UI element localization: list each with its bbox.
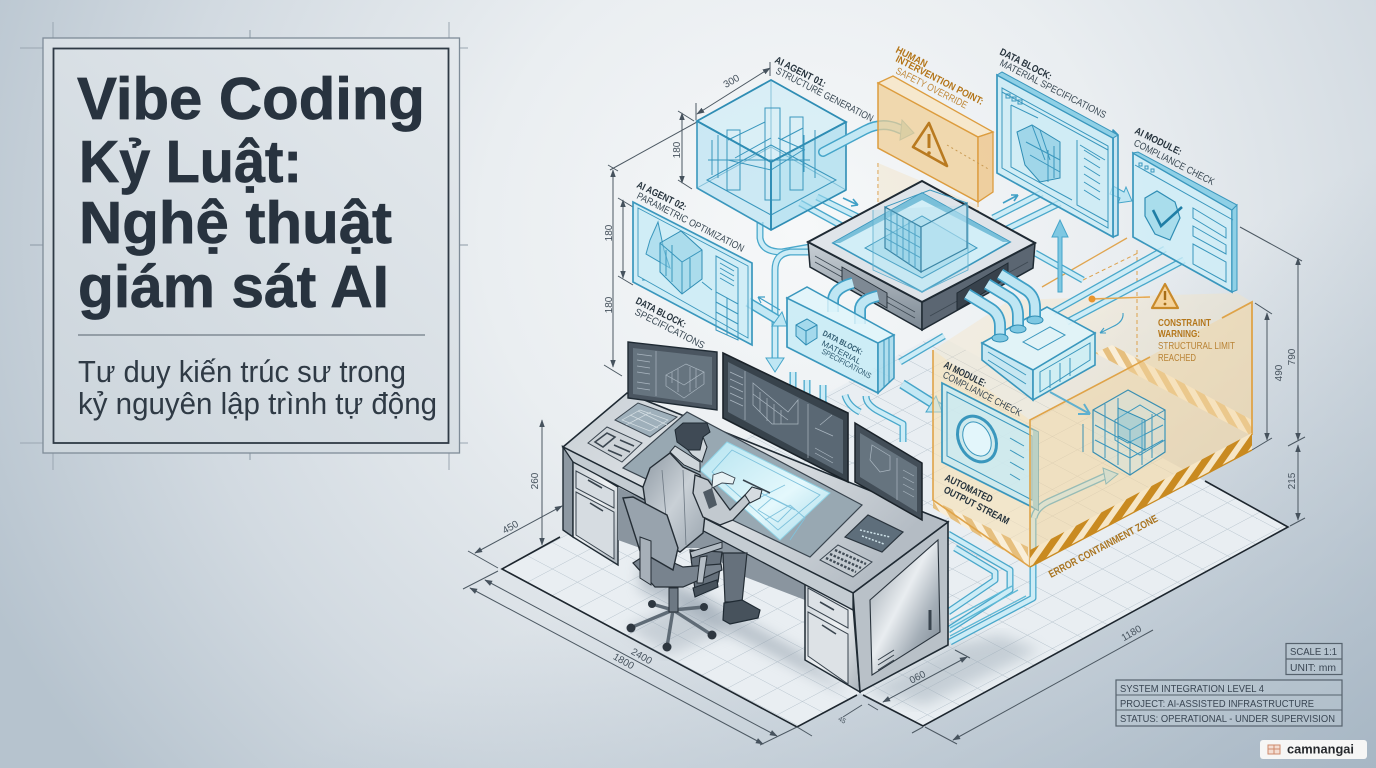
label: AI module top (1132, 126, 1216, 188)
icon: ring diagram (950, 409, 1004, 469)
label: error containment zone: ERROR CONTAINMENT ZONE (1047, 513, 1160, 581)
icon: small data cube (796, 319, 817, 345)
arrow: cube to human override (823, 120, 914, 152)
dimension labels: 790 (1287, 348, 1298, 365)
panel: data block center (787, 287, 894, 393)
label: data block specifications: DATA BLOCK: (634, 296, 688, 331)
left pedestal (563, 447, 618, 565)
label: human intervention point: INTERVENTION POINT: (894, 54, 985, 108)
label: human intervention point: HUMAN (894, 45, 929, 70)
dimension labels: 180 (604, 224, 615, 241)
label: AI agent 02: AI AGENT 02: (635, 180, 688, 213)
panel: data block center: SPECIFICATIONS (820, 347, 873, 381)
title frame (20, 22, 468, 470)
badge: camnangai: camnangai (1287, 742, 1354, 756)
label: AI module lower: COMPLIANCE CHECK (941, 370, 1023, 419)
flow arrows (758, 186, 1132, 484)
title: Kỷ Luật: (79, 128, 302, 195)
panel: data block center: DATA BLOCK: (821, 329, 864, 357)
dimension labels: 1800 (611, 652, 636, 672)
project title block: PROJECT: AI-ASSISTED INFRASTRUCTURE (1120, 698, 1314, 710)
floor grid (502, 334, 1288, 727)
head (688, 437, 707, 462)
orange frame: containment walls left (933, 350, 1030, 567)
monitor: right (855, 423, 922, 520)
label: automated output stream (942, 473, 1011, 527)
label: AI module top: COMPLIANCE CHECK (1132, 138, 1216, 188)
label: data block material specifications: DATA BLOCK: (998, 47, 1053, 83)
panel: AI agent 01 cube (697, 80, 846, 230)
icon: constraint warning (1088, 284, 1178, 308)
legs (690, 550, 747, 602)
title: Nghệ thuật (79, 189, 392, 256)
dimension labels: 060 (908, 669, 928, 687)
monitor: left (628, 342, 717, 410)
monitor: center (723, 353, 848, 482)
icon: book (1268, 745, 1280, 754)
subtitle: Tư duy kiến trúc sư trong (78, 354, 406, 389)
panel: data block center: MATERIAL (820, 339, 863, 367)
dimension labels: 180 (604, 296, 615, 313)
dimension labels (501, 73, 1298, 726)
badge: camnangai (1260, 740, 1367, 759)
dimension lines (463, 62, 1305, 745)
label: AI agent 01 (773, 55, 875, 125)
label: automated output stream: OUTPUT STREAM (942, 485, 1011, 527)
panel: compliance check lower (942, 383, 1038, 510)
arm (693, 475, 750, 525)
desk top (563, 393, 948, 610)
torso (643, 453, 707, 552)
subtitle: kỷ nguyên lập trình tự động (78, 386, 437, 421)
subtitle (78, 354, 437, 421)
label: AI module lower: AI MODULE: (942, 360, 988, 390)
operator (643, 423, 770, 624)
icon: check badge (1145, 191, 1182, 240)
text: constraint warning: WARNING: (1158, 328, 1200, 340)
text: constraint warning: REACHED (1158, 352, 1196, 364)
dimension labels: 45 (837, 716, 847, 726)
title (77, 65, 425, 320)
label: AI agent 02: PARAMETRIC OPTIMIZATION (635, 191, 746, 255)
text: constraint warning (1158, 317, 1235, 364)
project title block: SYSTEM INTEGRATION LEVEL 4 (1120, 683, 1264, 695)
title: giám sát AI (78, 253, 389, 320)
label: data block material specifications (998, 47, 1108, 121)
dimension labels: 2400 (629, 647, 654, 667)
pipes: hub to data block and manifold (833, 283, 878, 324)
divider (78, 334, 425, 336)
dimension labels: 180 (672, 141, 683, 158)
scale box: SCALE 1:1 (1290, 646, 1337, 658)
scale box: UNIT: mm (1290, 662, 1336, 674)
panel: material specifications (997, 72, 1118, 237)
scale box (1286, 644, 1342, 674)
under desk shadow (618, 487, 805, 600)
manifold block (967, 274, 1095, 400)
panel: compliance check top (1133, 152, 1237, 292)
wireframe cube in containment (1050, 390, 1165, 475)
keypads and tablets (588, 403, 903, 577)
label: AI agent 01: AI AGENT 01: (773, 55, 828, 90)
panel: central hub (808, 181, 1035, 330)
error containment zone: back and floor (933, 238, 1252, 567)
label: data block material specifications: MATERIAL SPECIFICATIONS (998, 58, 1108, 121)
label: AI module lower (941, 360, 1023, 419)
text: constraint warning: CONSTRAINT (1158, 317, 1211, 329)
dimension labels: 1180 (1120, 623, 1144, 644)
dimension labels: 260 (530, 472, 541, 489)
label: human intervention point: SAFETY OVERRIDE (894, 66, 969, 112)
label: AI agent 02 (635, 180, 746, 255)
icon: warning triangle (913, 123, 947, 166)
label: data block specifications: SPECIFICATIONS (633, 307, 707, 352)
title: Vibe Coding (77, 65, 425, 132)
dimension labels: 215 (1287, 472, 1298, 489)
dimension labels: 490 (1274, 364, 1285, 381)
label: AI module top: AI MODULE: (1133, 126, 1183, 158)
connecting pipes (748, 193, 1184, 642)
text: constraint warning: STRUCTURAL LIMIT (1158, 340, 1235, 352)
label: automated output stream: AUTOMATED (943, 473, 994, 505)
panel: human intervention point (878, 76, 993, 255)
dimension labels: 300 (722, 73, 742, 91)
hub ports (842, 263, 1008, 310)
dimension labels: 450 (501, 519, 521, 537)
chair (623, 497, 722, 652)
panel: AI agent 02 (633, 202, 752, 345)
right pedestal (805, 522, 948, 692)
control desk (563, 342, 948, 692)
panel: orange containment front wall (1030, 302, 1252, 567)
holographic work surface (623, 412, 862, 557)
project title block (1116, 680, 1342, 726)
project title block: STATUS: OPERATIONAL - UNDER SUPERVISION (1120, 713, 1335, 725)
label: AI agent 01: STRUCTURE GENERATION (774, 66, 875, 125)
